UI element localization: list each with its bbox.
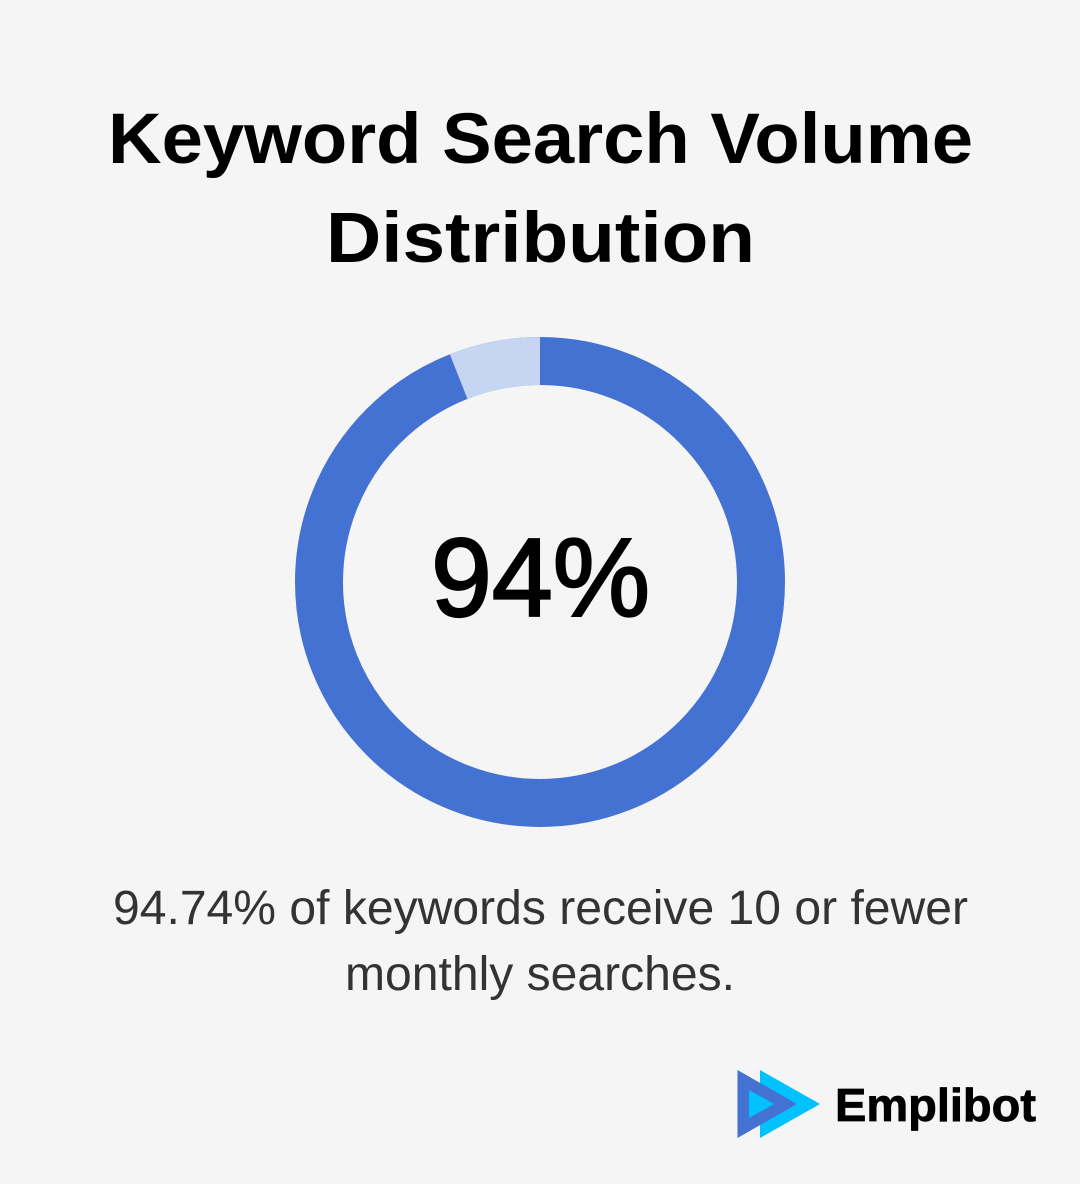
title — [108, 100, 973, 278]
title: Keyword Search Volume — [108, 100, 973, 179]
description text: monthly searches. — [345, 948, 735, 1001]
wordmark: Emplibot — [835, 1079, 1036, 1131]
logo: Emplibot — [738, 1070, 1036, 1138]
center value: 94% — [431, 516, 650, 640]
description text: 94.74% of keywords receive 10 or fewer — [113, 882, 968, 935]
description text — [113, 882, 968, 1001]
title: Distribution — [326, 199, 755, 278]
donut chart: 94% — [319, 361, 761, 803]
icon: play triangles — [738, 1070, 820, 1138]
remaining 6% segment — [459, 361, 540, 376]
